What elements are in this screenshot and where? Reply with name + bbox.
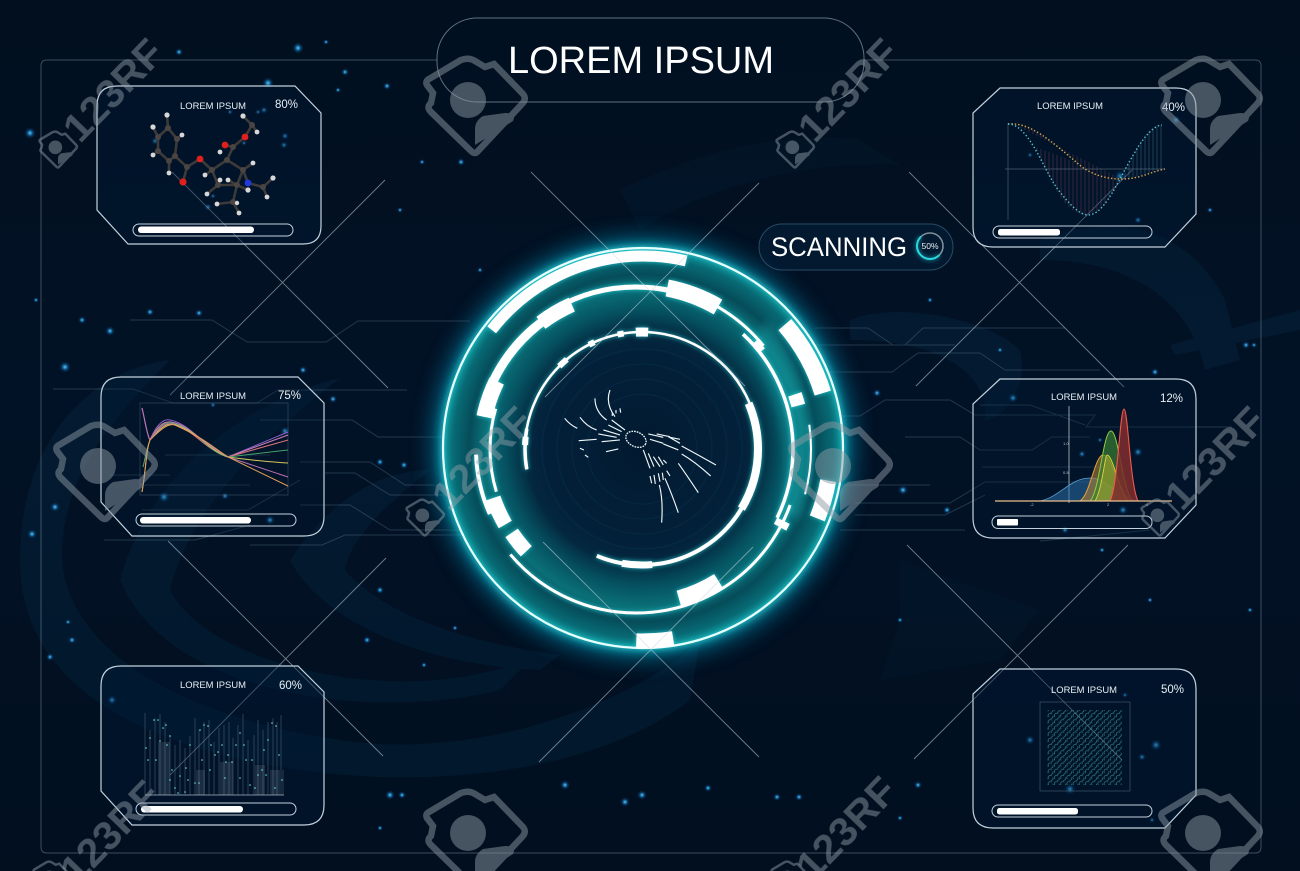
- panel: dotted wave chart: LOREM IPSUM: [1037, 101, 1103, 112]
- title: LOREM IPSUM: [508, 40, 774, 82]
- panel: density chart: LOREM IPSUM: [1051, 392, 1117, 403]
- panel: molecule: [97, 86, 321, 244]
- watermark: 123RF text: 123RF: [424, 399, 542, 519]
- progress bar 50%: [992, 805, 1152, 817]
- diagonal cross lines: [168, 170, 1132, 775]
- density chart: 0.5: [1063, 470, 1069, 475]
- panel: density chart: [973, 379, 1196, 538]
- scatter chart: [145, 713, 284, 795]
- background swirl shapes: [20, 137, 1300, 777]
- panel: multi line chart: LOREM IPSUM: [180, 391, 246, 402]
- central burst: [565, 390, 716, 523]
- second ring arcs and blocks: [461, 274, 811, 624]
- central HUD circle: [438, 243, 848, 653]
- scanning badge: [759, 224, 953, 270]
- teal ring body: [443, 248, 843, 648]
- panel: molecule: LOREM IPSUM: [180, 101, 246, 112]
- panel: matrix chart: 50%: [1161, 684, 1184, 696]
- watermark: 123RF text: 123RF: [55, 31, 173, 151]
- panel: dotted wave chart: [973, 88, 1196, 247]
- panel: dotted wave chart: 40%: [1162, 102, 1185, 114]
- molecule model: [150, 112, 276, 215]
- scanning badge: SCANNING: [771, 232, 907, 262]
- panel: matrix chart: LOREM IPSUM: [1051, 685, 1117, 696]
- wave chart: [1005, 123, 1165, 220]
- density chart: -2: [1030, 502, 1034, 507]
- panel: scatter chart: 60%: [279, 680, 302, 692]
- panel: multi line chart: 75%: [278, 390, 301, 402]
- line chart: [140, 403, 288, 495]
- panel: multi line chart: [101, 377, 324, 536]
- scanning progress ring: [917, 233, 943, 259]
- scanning progress ring: 50%: [921, 241, 939, 251]
- progress bar 80%: [133, 224, 293, 236]
- ring segments: [443, 248, 843, 648]
- progress bar 40%: [993, 226, 1152, 238]
- density chart: 1.0: [1063, 441, 1069, 446]
- matrix chart: [1040, 702, 1130, 791]
- panel: scatter chart: [101, 666, 324, 825]
- panel: density chart: 12%: [1160, 393, 1183, 405]
- watermark: 123RF text: 123RF: [790, 31, 908, 151]
- panel: matrix chart: [973, 669, 1196, 828]
- circuit lines right: [815, 328, 1232, 541]
- density chart: [995, 406, 1172, 507]
- density chart: 4: [1146, 502, 1149, 507]
- progress bar 60%: [136, 803, 296, 815]
- inner dark disc: [525, 332, 759, 566]
- inner ring arcs and blocks: [525, 332, 759, 566]
- outer glow: [438, 243, 848, 653]
- panel: scatter chart: LOREM IPSUM: [180, 680, 246, 691]
- bright highlight right: [745, 320, 810, 520]
- progress bar 75%: [136, 514, 296, 526]
- progress bar 12%: [992, 516, 1152, 528]
- panel: molecule: 80%: [275, 99, 298, 111]
- density chart: 2: [1107, 502, 1110, 507]
- circuit lines left: [53, 320, 470, 545]
- outer ring line and blocks: [443, 248, 843, 648]
- title frame: [437, 18, 864, 102]
- watermark: 123RF text: 123RF: [1157, 399, 1275, 519]
- faint concentric rings: [542, 349, 742, 549]
